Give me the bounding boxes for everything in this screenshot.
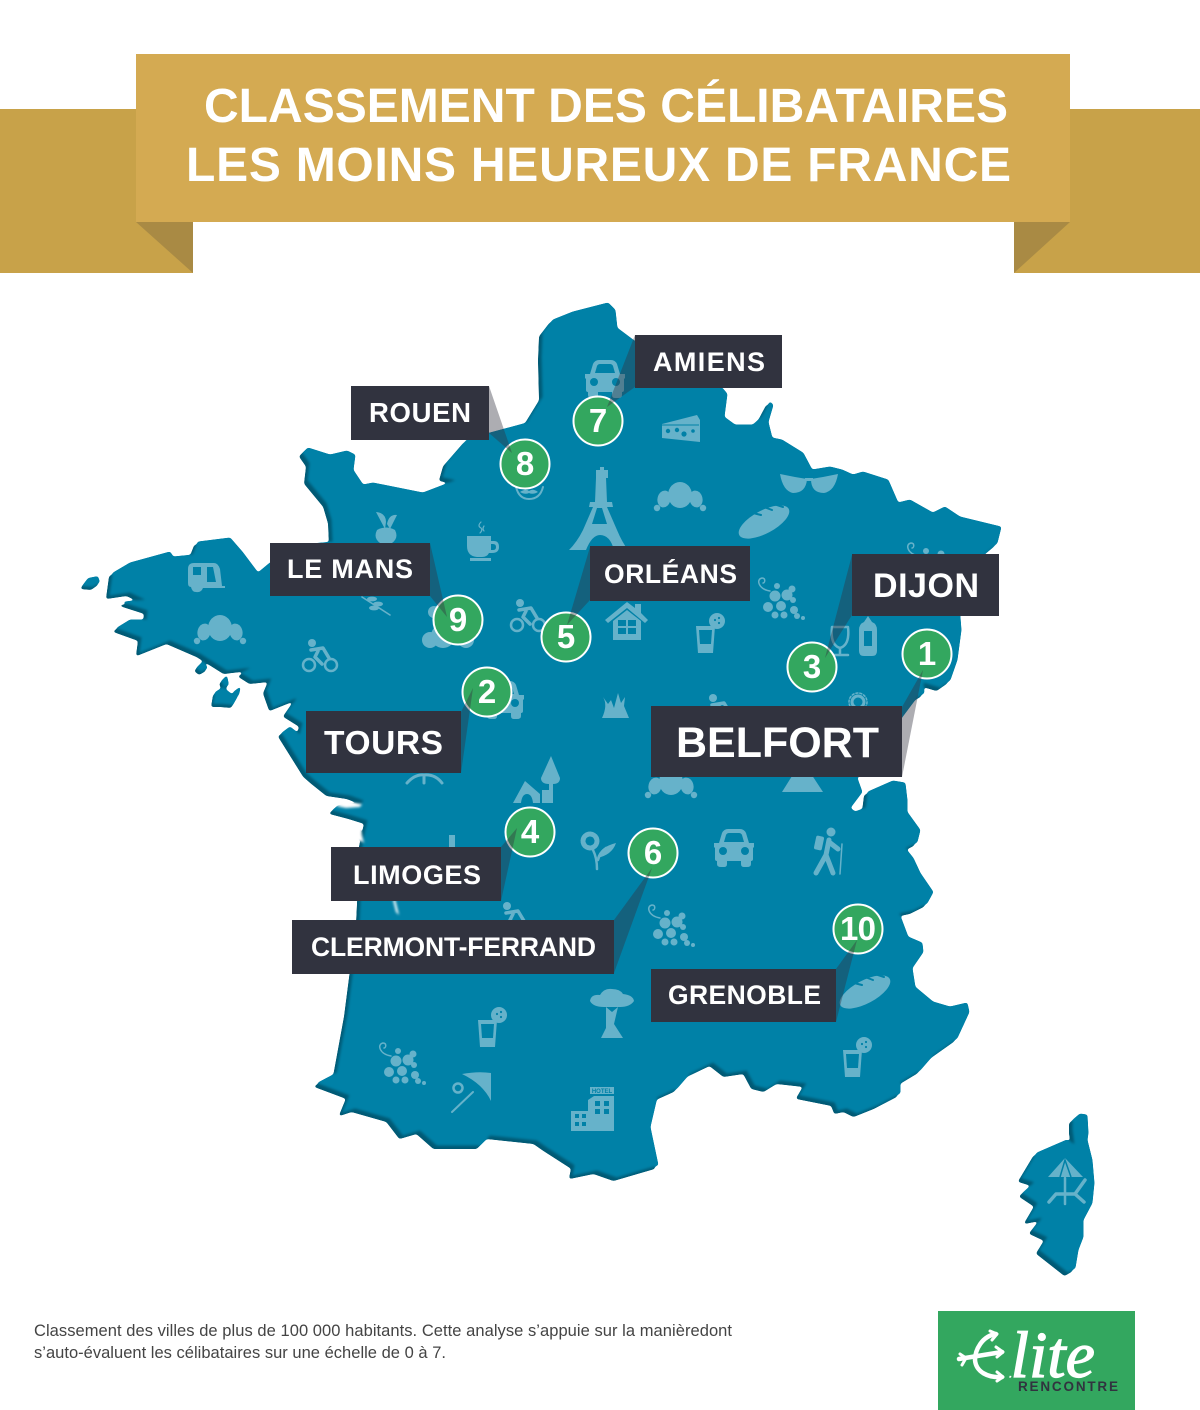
icon: grapes centre: [649, 905, 695, 947]
icon: car behind 2: [484, 681, 524, 719]
icon: hiker: [814, 828, 842, 874]
rank 3 marker: [788, 642, 836, 692]
rank 3 marker: 3: [803, 648, 821, 685]
label: Dijon: DIJON: [873, 567, 979, 605]
icon: fruit behind 9: [422, 595, 478, 648]
label: Limoges: LIMOGES: [353, 860, 481, 890]
icon: croissant partial: [645, 769, 697, 798]
icon: bottle: [859, 616, 877, 656]
icon: beach lounger: [1048, 1158, 1085, 1204]
rank 2 marker: [462, 668, 512, 716]
icon: flower: [583, 834, 616, 869]
icon: wine glass: [832, 627, 848, 655]
label: Belfort: [651, 670, 923, 777]
rank 5 marker: 5: [557, 618, 575, 655]
icon: hotel: [571, 1087, 614, 1131]
icon: house: [605, 602, 648, 640]
rank 6 marker: [628, 828, 678, 878]
icon: juice centre: [696, 613, 725, 653]
label: Limoges: [331, 828, 517, 901]
rank 1 marker: [902, 630, 952, 678]
footnote: [34, 1322, 732, 1362]
rank 8 marker: 8: [516, 445, 534, 482]
label: Amiens: [607, 335, 782, 407]
icon: car north: [585, 360, 625, 398]
label: Le Mans: [270, 543, 447, 617]
rank 10 marker: [834, 904, 882, 954]
icon: croissant Brittany: [194, 615, 246, 644]
icon: coffee cup: [467, 522, 499, 561]
label: Le Mans: LE MANS: [287, 554, 413, 584]
icon: tree and hut: [513, 756, 560, 803]
logo: Elite Rencontre: [938, 1311, 1135, 1410]
label: Clermont-Ferrand: [292, 868, 652, 974]
icon: hotel: HOTEL: [592, 1089, 612, 1095]
icon: cheese: [662, 415, 700, 442]
logo: Elite Rencontre: Elite: [1009, 1319, 1095, 1392]
label: Tours: TOURS: [324, 725, 443, 762]
icon: car centre: [714, 829, 754, 867]
icon: Eiffel tower: [569, 467, 628, 550]
rank 9 marker: [434, 596, 482, 644]
label: Dijon: [825, 554, 999, 658]
footnote: s’auto-évaluent les célibataires sur une échelle de 0 à 7.: [34, 1344, 446, 1362]
label: Belfort: BELFORT: [676, 719, 879, 767]
icon: grapes east: [759, 578, 805, 620]
icon: grapes south-west: [380, 1043, 426, 1085]
banner ribbon: [0, 54, 1200, 273]
title: CLASSEMENT DES CÉLIBATAIRES: [204, 79, 1008, 133]
icon: tree: [590, 989, 634, 1038]
icon: table partial: [407, 775, 442, 783]
icon: parasol: [452, 1072, 491, 1112]
icon: grapes north-east: [908, 543, 954, 585]
label: Grenoble: [651, 940, 857, 1022]
icon: juice south-east: [843, 1037, 872, 1077]
icon: bike partial south: [498, 902, 532, 934]
label: Rouen: ROUEN: [369, 397, 471, 428]
icon: apple plant: [376, 512, 397, 543]
map of Corsica: [1018, 1114, 1094, 1276]
icon: wheat: [362, 597, 390, 615]
icon: bread north: [734, 499, 794, 545]
label: Rouen: [351, 386, 512, 453]
icon: caravan: [188, 563, 225, 592]
label: Orléans: [567, 546, 750, 625]
icon: bike west: [303, 639, 337, 671]
logo: Elite Rencontre: RENCONTRE: [1018, 1379, 1118, 1394]
icon: mountain partial: [782, 760, 823, 792]
rank 4 marker: 4: [521, 813, 540, 850]
icon: moustache face behind 8: [516, 487, 543, 499]
rank 4 marker: [506, 808, 554, 856]
map icons: [188, 360, 1085, 1204]
icon: cyclist partial: [704, 694, 738, 726]
label: Amiens: AMIENS: [653, 347, 765, 377]
rank 10 marker: 10: [840, 910, 876, 947]
rank 2 marker: 2: [478, 673, 496, 710]
rank 8 marker: [500, 440, 550, 488]
rank 1 marker: 1: [918, 635, 936, 672]
logo arrow emblem: [959, 1331, 1003, 1381]
rank 7 marker: 7: [589, 402, 607, 439]
label: Grenoble: GRENOBLE: [668, 980, 821, 1010]
rank 6 marker: 6: [644, 834, 662, 871]
label: Orléans: ORLÉANS: [604, 559, 737, 589]
map of France: [80, 303, 1001, 1180]
rank 7 marker: [574, 396, 622, 446]
title: [186, 79, 1011, 192]
title: LES MOINS HEUREUX DE FRANCE: [186, 139, 1011, 192]
icon: croissant north: [654, 482, 706, 511]
icon: grass: [602, 693, 629, 718]
rank 9 marker: 9: [449, 601, 467, 638]
rank 5 marker: [542, 612, 590, 662]
icon: lighthouse partial: [449, 835, 455, 849]
label: Clermont-Ferrand: CLERMONT-FERRAND: [311, 932, 596, 962]
footnote: Classement des villes de plus de 100 000 habitants. Cette analyse s’appuie sur la manièredont: [34, 1322, 732, 1340]
icon: juice south-west: [478, 1007, 507, 1047]
icon: bike centre: [511, 599, 545, 631]
label: Tours: [306, 688, 473, 773]
icon: sun: [849, 693, 867, 711]
icon: bread south-east: [835, 969, 895, 1015]
icon: sunglasses: [780, 474, 838, 493]
